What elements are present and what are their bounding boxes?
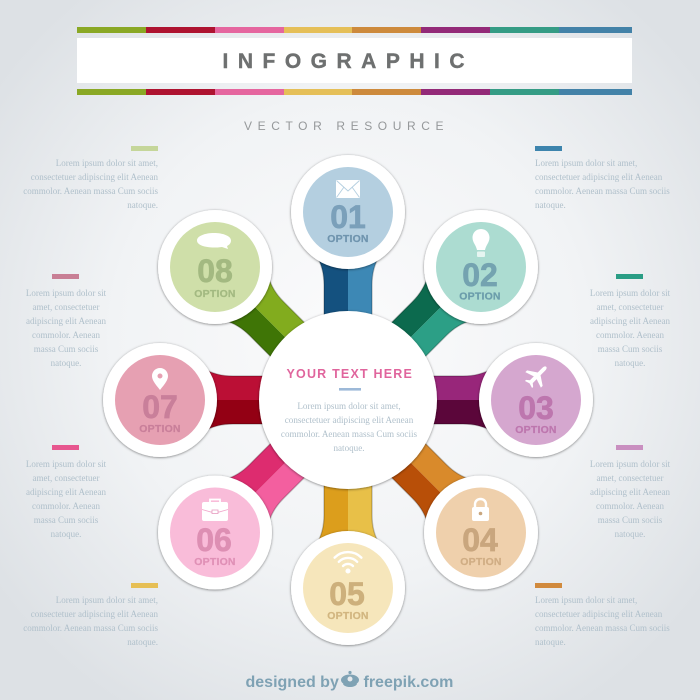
note: lower right <box>590 445 671 539</box>
title banner: INFOGRAPHIC <box>222 50 474 73</box>
icon: wifi <box>335 552 361 573</box>
central hub <box>259 311 437 489</box>
note: lower left: Lorem ipsum dolor sit <box>26 459 107 469</box>
note: lower left <box>26 445 107 539</box>
note: upper right <box>590 274 671 368</box>
icon: light bulb <box>472 229 490 257</box>
hub text: Lorem ipsum dolor sit amet, <box>297 401 401 411</box>
note: bottom left: consectetuer adipiscing elit Aenean <box>31 609 158 619</box>
footer credit: designed by <box>246 674 339 691</box>
note: lower left: natoque. <box>51 529 81 539</box>
hub text: commolor. Aenean massa Cum sociis <box>281 429 418 439</box>
option 05 <box>291 531 405 645</box>
note: upper left: adipiscing elit Aenean <box>26 316 106 326</box>
icon: freepik logo <box>341 671 359 687</box>
note: top right: Lorem ipsum dolor sit amet, <box>535 158 637 168</box>
icon: briefcase <box>202 500 228 521</box>
note: upper left: natoque. <box>51 358 81 368</box>
note: lower right: amet, consectetuer <box>597 473 663 483</box>
note: bottom right: commolor. Aenean massa Cum sociis <box>535 623 670 633</box>
note: lower right: massa Cum sociis <box>598 515 663 525</box>
option 06: 06 <box>196 522 232 558</box>
note: lower left: commolor. Aenean <box>32 501 100 511</box>
icon: plane <box>521 359 554 392</box>
note: upper left: massa Cum sociis <box>34 344 99 354</box>
option 03 <box>479 343 593 457</box>
note: bottom left <box>23 583 158 647</box>
footer credit <box>246 671 453 691</box>
option 07 <box>103 343 217 457</box>
note: bottom left: natoque. <box>127 637 158 647</box>
option 06 <box>158 476 272 590</box>
note: upper left: Lorem ipsum dolor sit <box>26 288 107 298</box>
connector 05 <box>317 478 379 544</box>
connector 07 <box>204 369 270 431</box>
option 06: OPTION <box>194 556 236 568</box>
option 08: 08 <box>197 253 233 289</box>
option 01: OPTION <box>327 233 369 245</box>
hub text: natoque. <box>333 443 365 453</box>
note: top left <box>23 146 158 210</box>
icon: map pin <box>152 368 168 390</box>
note: lower right: natoque. <box>615 529 645 539</box>
subtitle: VECTOR RESOURCE <box>244 119 449 133</box>
note: bottom right: natoque. <box>535 637 566 647</box>
option 01: 01 <box>330 199 366 235</box>
footer credit: freepik.com <box>364 674 453 691</box>
option 03: 03 <box>518 390 554 426</box>
note: upper right: Lorem ipsum dolor sit <box>590 288 671 298</box>
icon: speech bubble <box>197 233 231 249</box>
note: upper right: adipiscing elit Aenean <box>590 316 670 326</box>
note: bottom right <box>535 583 670 647</box>
title banner <box>77 27 632 95</box>
connector 02 <box>381 276 472 367</box>
option 08: OPTION <box>194 288 236 300</box>
note: top left: consectetuer adipiscing elit Aenean <box>31 172 158 182</box>
note: lower left: massa Cum sociis <box>34 515 99 525</box>
option 02: OPTION <box>459 290 501 302</box>
option 02: 02 <box>462 257 498 293</box>
note: top right <box>535 146 670 210</box>
note: upper right: massa Cum sociis <box>598 344 663 354</box>
option 01 <box>291 155 405 269</box>
note: lower right: Lorem ipsum dolor sit <box>590 459 671 469</box>
note: lower right: commolor. Aenean <box>596 501 664 511</box>
option 08 <box>158 210 272 324</box>
option 07: 07 <box>142 389 178 425</box>
note: bottom right: Lorem ipsum dolor sit amet, <box>535 595 637 605</box>
option 05: 05 <box>329 576 365 612</box>
connector 06 <box>224 433 315 524</box>
note: lower left: amet, consectetuer <box>33 473 99 483</box>
option 05: OPTION <box>327 610 369 622</box>
note: bottom left: Lorem ipsum dolor sit amet, <box>56 595 158 605</box>
note: top left: Lorem ipsum dolor sit amet, <box>56 158 158 168</box>
note: top right: commolor. Aenean massa Cum sociis <box>535 186 670 196</box>
option 03: OPTION <box>515 424 557 436</box>
hub heading: YOUR TEXT HERE <box>286 367 413 381</box>
icon: padlock <box>472 499 489 521</box>
option 07: OPTION <box>139 423 181 435</box>
option 04: OPTION <box>460 556 502 568</box>
option 02 <box>424 210 538 324</box>
note: top right: natoque. <box>535 200 566 210</box>
option 04: 04 <box>462 522 498 558</box>
hub text: consectetuer adipiscing elit Aenean <box>285 415 414 425</box>
note: upper right: amet, consectetuer <box>597 302 663 312</box>
icon: envelope <box>336 180 360 198</box>
note: upper right: commolor. Aenean <box>596 330 664 340</box>
connector 01 <box>317 256 379 322</box>
note: top left: natoque. <box>127 200 158 210</box>
connector 08 <box>224 276 315 367</box>
connector 04 <box>381 433 472 524</box>
note: upper left: commolor. Aenean <box>32 330 100 340</box>
note: top left: commolor. Aenean massa Cum sociis <box>23 186 158 196</box>
option 04 <box>424 476 538 590</box>
note: bottom left: commolor. Aenean massa Cum sociis <box>23 623 158 633</box>
note: lower left: adipiscing elit Aenean <box>26 487 106 497</box>
note: bottom right: consectetuer adipiscing elit Aenean <box>535 609 663 619</box>
connector 03 <box>426 369 492 431</box>
note: upper right: natoque. <box>615 358 645 368</box>
note: top right: consectetuer adipiscing elit Aenean <box>535 172 663 182</box>
note: upper left <box>26 274 107 368</box>
note: lower right: adipiscing elit Aenean <box>590 487 670 497</box>
note: upper left: amet, consectetuer <box>33 302 99 312</box>
